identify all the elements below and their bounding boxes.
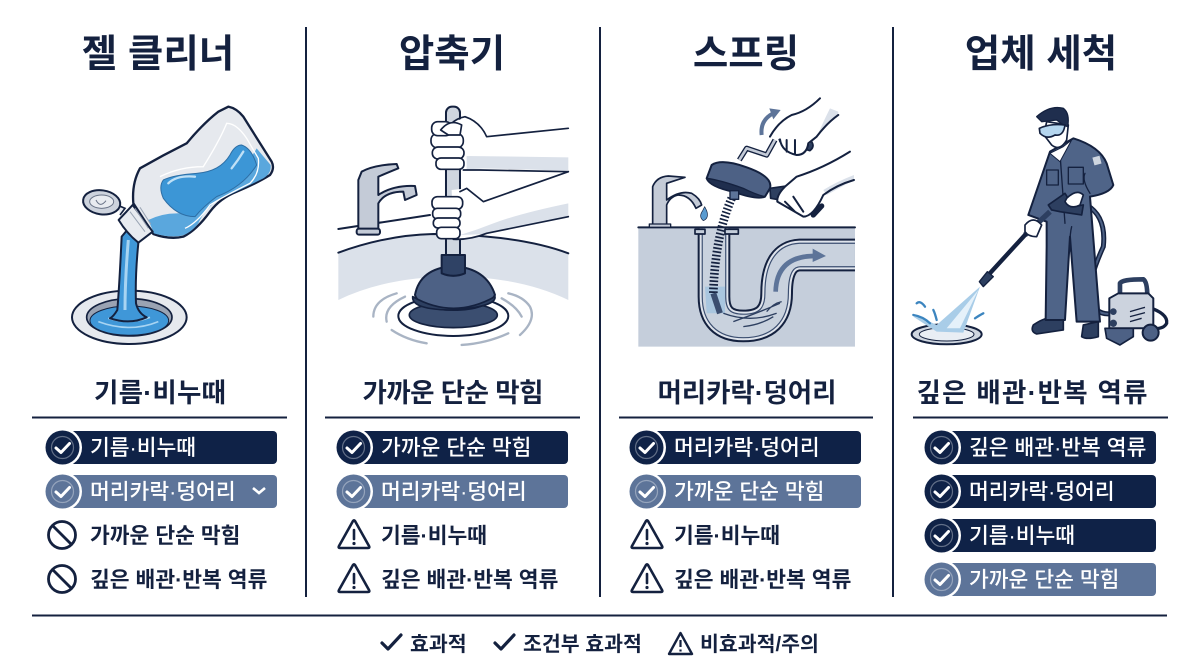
list: spring ratings: 가까운 단순 막힘 [674, 480, 824, 504]
heading: plunger: 압축기 [399, 33, 505, 76]
heading: professional cleaning: 업체 세척 [965, 33, 1117, 76]
list: spring ratings: 기름·비누때 [674, 524, 780, 548]
list: spring ratings [627, 428, 861, 592]
illustration: drain snake in P-trap [638, 98, 855, 347]
list: plunger ratings [334, 428, 568, 592]
legend item: ineffective or caution: 비효과적/주의 [700, 633, 819, 656]
subtitle: 가까운 단순 막힘 [362, 378, 544, 408]
subtitle: 깊은 배관·반복 역류 [916, 378, 1148, 408]
panel: plunger [334, 33, 568, 592]
illustration: hands using plunger in sink [338, 107, 568, 345]
legend item: conditionally effective: 조건부 효과적 [523, 633, 642, 656]
legend item: effective: 효과적 [410, 633, 467, 656]
list: plunger ratings: 머리카락·덩어리 [381, 480, 527, 504]
illustration: bottle pouring gel into drain [72, 107, 273, 344]
list: plunger ratings: 기름·비누때 [381, 524, 487, 548]
panel: spring auger [627, 33, 861, 592]
panel: gel cleaner [43, 33, 277, 592]
panel: professional cleaning [912, 33, 1167, 599]
subtitle: 기름·비누때 [94, 378, 226, 408]
list: professional cleaning ratings: 기름·비누때 [969, 524, 1075, 548]
list: professional cleaning ratings: 가까운 단순 막힘 [969, 568, 1119, 592]
illustration: worker with pressure washer [912, 108, 1167, 345]
heading: spring: 스프링 [693, 33, 799, 76]
list: gel cleaner ratings: 깊은 배관·반복 역류 [90, 568, 267, 592]
legend item: effective [382, 633, 467, 656]
heading: gel cleaner: 젤 클리너 [82, 33, 234, 76]
list: professional cleaning ratings [922, 428, 1156, 599]
list: gel cleaner ratings: 기름·비누때 [90, 436, 196, 460]
list: spring ratings: 머리카락·덩어리 [674, 436, 820, 460]
list: spring ratings: 깊은 배관·반복 역류 [674, 568, 851, 592]
list: gel cleaner ratings: 가까운 단순 막힘 [90, 524, 240, 548]
list: professional cleaning ratings: 머리카락·덩어리 [969, 480, 1115, 504]
list: professional cleaning ratings: 깊은 배관·반복 역류 [969, 436, 1146, 460]
list: gel cleaner ratings [43, 428, 277, 592]
list: gel cleaner ratings: 머리카락·덩어리 [90, 480, 236, 504]
list: plunger ratings: 가까운 단순 막힘 [381, 436, 531, 460]
subtitle: 머리카락·덩어리 [658, 378, 836, 408]
legend [382, 633, 819, 656]
list: plunger ratings: 깊은 배관·반복 역류 [381, 568, 558, 592]
